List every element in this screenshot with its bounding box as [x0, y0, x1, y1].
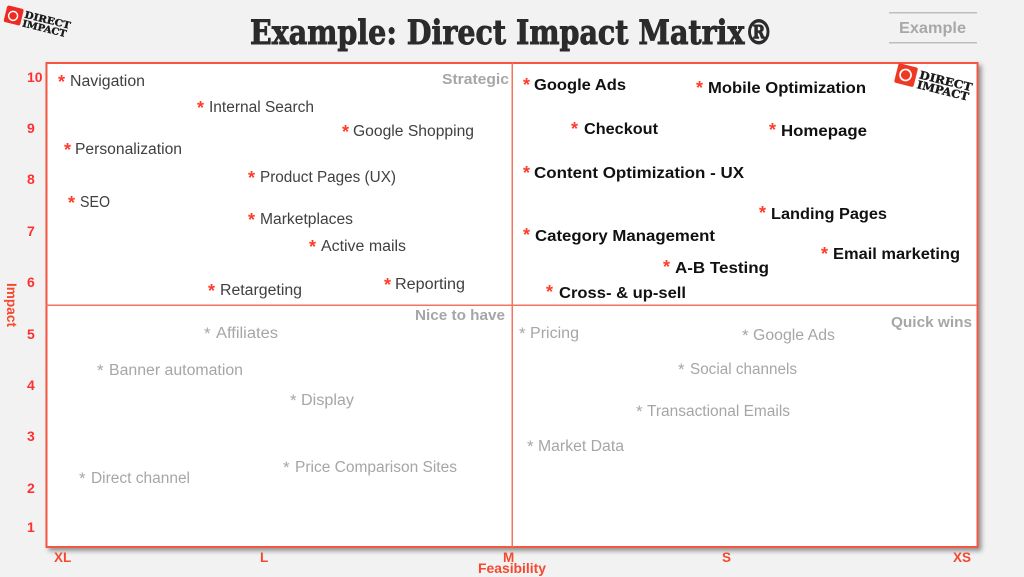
- top right items: *: [696, 78, 703, 98]
- quick wins items: Social channels: [690, 361, 797, 378]
- nice to have items: [79, 324, 457, 488]
- strategic items: *: [197, 98, 204, 118]
- nice to have items: *: [97, 361, 104, 380]
- strategic items: *: [342, 122, 349, 142]
- top right items: *: [571, 119, 578, 139]
- top right items: Mobile Optimization: [708, 80, 866, 97]
- top right items: *: [663, 257, 670, 277]
- strategic items: *: [309, 237, 316, 257]
- y axis numbers: 10: [27, 69, 43, 85]
- strategic items: Google Shopping: [353, 123, 474, 140]
- nice to have items: Affiliates: [216, 325, 278, 342]
- example tag: Example: [899, 20, 966, 37]
- y axis numbers: 2: [27, 480, 35, 496]
- nice to have items: *: [283, 458, 290, 477]
- logo: matrix corner: [893, 63, 974, 104]
- quick wins items: Transactional Emails: [647, 403, 790, 420]
- quadrant labels: Strategic: [442, 72, 509, 88]
- strategic items: *: [208, 281, 215, 301]
- y axis numbers: 5: [27, 326, 35, 342]
- quick wins items: *: [527, 437, 534, 456]
- strategic items: *: [58, 72, 65, 92]
- x axis labels: [54, 550, 971, 565]
- y axis numbers: 3: [27, 428, 35, 444]
- y axis numbers: [27, 69, 43, 535]
- top right items: *: [523, 225, 530, 245]
- logo: matrix corner: IMPACT: [916, 78, 971, 104]
- quadrant labels: Nice to have: [415, 308, 505, 324]
- nice to have items: Display: [301, 392, 354, 409]
- strategic items: SEO: [80, 194, 110, 211]
- x axis labels: M: [503, 550, 514, 565]
- strategic items: Navigation: [70, 73, 145, 90]
- strategic items: *: [248, 210, 255, 230]
- nice to have items: *: [290, 391, 297, 410]
- x axis labels: S: [722, 550, 731, 565]
- logo: top left: [3, 5, 72, 41]
- top right items: Landing Pages: [771, 206, 887, 223]
- quadrant labels: Quick wins: [891, 315, 972, 331]
- logo: top left: IMPACT: [21, 19, 67, 40]
- top right items: *: [523, 163, 530, 183]
- top right items: *: [759, 203, 766, 223]
- top right items: *: [546, 282, 553, 302]
- x axis labels: L: [260, 550, 268, 565]
- top right items: *: [769, 120, 776, 140]
- nice to have items: *: [79, 469, 86, 488]
- x axis labels: XL: [54, 550, 71, 565]
- nice to have items: *: [204, 324, 211, 343]
- top right items: *: [821, 244, 828, 264]
- y axis numbers: 4: [27, 377, 35, 393]
- quick wins items: *: [678, 360, 685, 379]
- y axis title: Impact: [4, 283, 19, 328]
- top right items: *: [523, 75, 530, 95]
- top right items: Homepage: [781, 123, 867, 140]
- quadrant labels: [415, 72, 972, 331]
- y axis numbers: 1: [27, 519, 35, 535]
- strategic items: Internal Search: [209, 99, 314, 116]
- strategic items: [58, 72, 474, 301]
- logo: top left: DIRECT: [23, 10, 72, 32]
- top right items: A-B Testing: [675, 260, 769, 277]
- strategic items: *: [384, 275, 391, 295]
- strategic items: Retargeting: [220, 282, 302, 299]
- top right items: [523, 75, 960, 302]
- top right items: Google Ads: [534, 77, 626, 94]
- title: Example: Direct Impact Matrix®: [250, 13, 773, 53]
- nice to have items: Price Comparison Sites: [295, 459, 457, 476]
- strategic items: Active mails: [321, 238, 406, 255]
- top right items: Checkout: [584, 121, 659, 138]
- quick wins items: *: [742, 326, 749, 345]
- top right items: Cross- & up-sell: [559, 285, 686, 302]
- nice to have items: Direct channel: [91, 470, 190, 487]
- quick wins items: *: [519, 324, 526, 343]
- quick wins items: *: [636, 402, 643, 421]
- example tag: [889, 12, 977, 44]
- x axis labels: XS: [953, 550, 971, 565]
- quick wins items: Pricing: [530, 325, 579, 342]
- y axis numbers: 6: [27, 274, 35, 290]
- strategic items: Marketplaces: [260, 211, 353, 228]
- y axis numbers: 9: [27, 120, 35, 136]
- strategic items: Product Pages (UX): [260, 169, 396, 186]
- quick wins items: Google Ads: [753, 327, 835, 344]
- x axis title: Feasibility: [478, 561, 546, 576]
- strategic items: *: [68, 193, 75, 213]
- matrix panel: [46, 63, 978, 547]
- quick wins items: Market Data: [538, 438, 624, 455]
- strategic items: Reporting: [395, 276, 465, 293]
- strategic items: *: [64, 140, 71, 160]
- logo: matrix corner: DIRECT: [918, 69, 974, 94]
- top right items: Category Management: [535, 228, 716, 245]
- y axis numbers: 7: [27, 223, 35, 239]
- nice to have items: Banner automation: [109, 362, 243, 379]
- top right items: Email marketing: [833, 246, 960, 263]
- quick wins items: [519, 324, 835, 456]
- y axis numbers: 8: [27, 171, 35, 187]
- strategic items: *: [248, 168, 255, 188]
- top right items: Content Optimization - UX: [534, 165, 744, 182]
- strategic items: Personalization: [75, 141, 182, 158]
